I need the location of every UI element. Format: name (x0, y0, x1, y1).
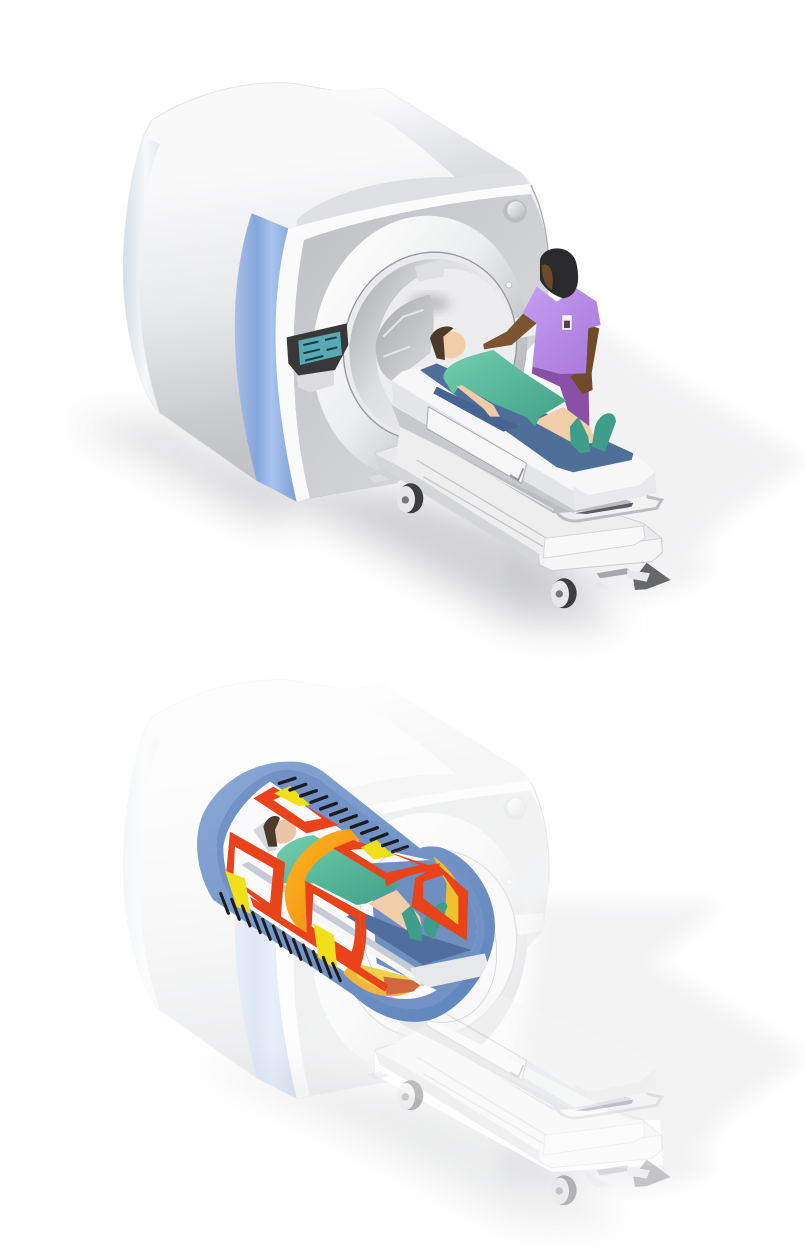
right gradient coil (333, 840, 438, 881)
table bar (242, 862, 430, 987)
white table underlay (375, 1020, 663, 1172)
table foot (410, 953, 488, 987)
cutaway bore (197, 762, 520, 1042)
floor shadow (70, 300, 806, 625)
lower coil windings (221, 893, 340, 981)
gold main ring (285, 829, 360, 935)
outer cylinder (197, 762, 495, 1022)
patient (277, 835, 400, 905)
bore opening outline (336, 828, 520, 1042)
mattress (347, 910, 472, 965)
white interior (223, 782, 477, 999)
ghosted patient table (367, 963, 671, 1205)
front gradient coil (305, 881, 366, 968)
panel: transparent MRI scanner showing internal coils (123, 680, 806, 1222)
pillow (253, 822, 277, 852)
nurse (483, 248, 601, 427)
patient table (367, 366, 671, 608)
scanner body (123, 83, 549, 502)
yellow shim front (313, 923, 337, 971)
yellow shim upper left (274, 786, 310, 806)
faded floor shadow (190, 900, 806, 1222)
mattress and patient (420, 326, 633, 472)
panel: complete MRI scanner with patient and nurse (70, 83, 806, 625)
yellow shim left (225, 871, 251, 914)
upper left gradient coil (253, 787, 338, 833)
ghosted scanner body (123, 680, 549, 1099)
lower red bar (250, 897, 388, 992)
control console (287, 323, 348, 392)
rear right coil (433, 857, 467, 930)
bottom gold coil (343, 963, 423, 996)
yellow shim upper right (361, 840, 394, 859)
upper coil windings (279, 778, 407, 852)
left gradient coil (226, 832, 285, 920)
